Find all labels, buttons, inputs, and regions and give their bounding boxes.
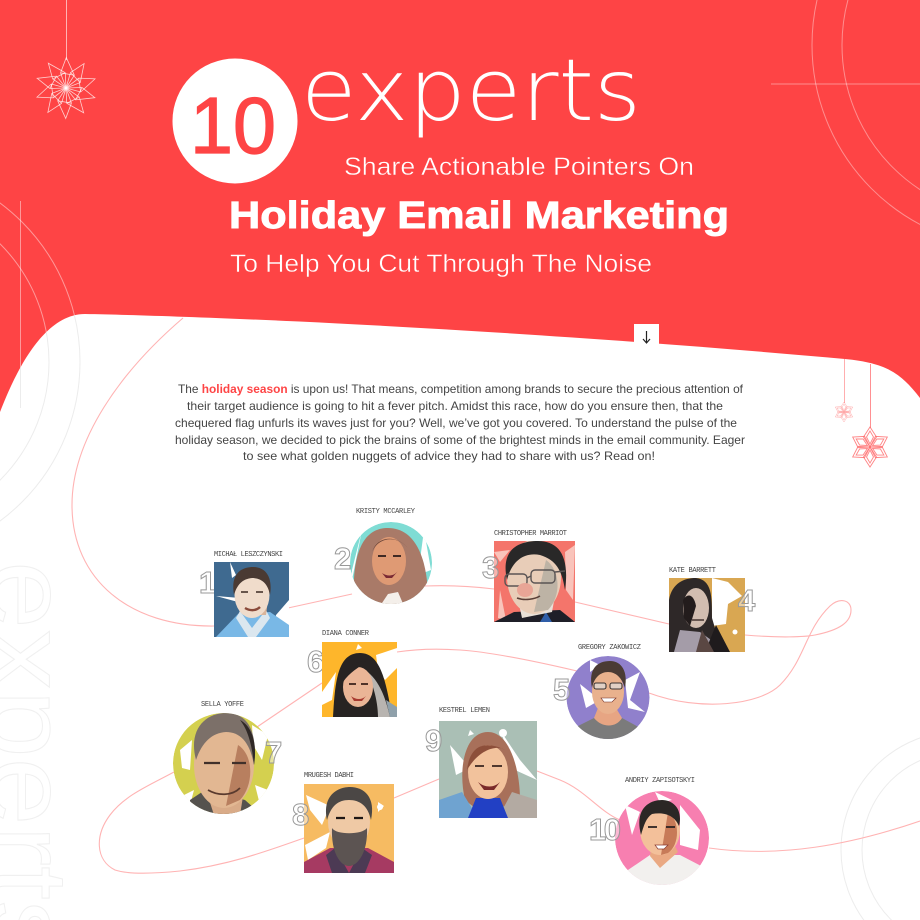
heading line: share actionable pointers: Share Actionable Pointers On: [344, 153, 694, 181]
expert 10: Andriy Zapisotskyi: ANDRIY ZAPISOTSKYI: [625, 777, 695, 785]
expert 1: Michał Leszczynski: MICHAŁ LESZCZYNSKI: [214, 551, 283, 559]
expert 6: Diana Conner: [307, 630, 397, 717]
intro paragraph: The holiday season is upon us! That means, competition among brands to secure the precious attention of: [178, 383, 744, 396]
snowflake ornament: large pink: [849, 364, 891, 467]
expert 8: Mrugesh Dabhi: [292, 772, 394, 873]
snowflake ornament: top left: [30, 0, 102, 123]
expert 7: Sella Yoffe: 7: [265, 735, 282, 770]
badge: number 10: [172, 58, 298, 184]
expert 5: Gregory Zakowicz: GREGORY ZAKOWICZ: [578, 644, 641, 652]
decorative rings: top right on red: [771, 0, 920, 248]
expert 4: Kate Barrett: 4: [738, 583, 756, 618]
white content panel: [0, 314, 920, 920]
intro paragraph: [175, 383, 745, 463]
intro paragraph: chequered flag unfurls its waves just for you? Well, we’ve got you covered. To understand the pulse of the: [175, 417, 737, 430]
expert 5: Gregory Zakowicz: [553, 644, 650, 745]
expert 6: Diana Conner: DIANA CONNER: [322, 630, 370, 638]
heading line: cut through the noise: To Help You Cut Through The Noise: [230, 250, 652, 278]
expert 3: Christopher Marriot: 3: [482, 550, 499, 585]
expert 8: Mrugesh Dabhi: MRUGESH DABHI: [304, 772, 354, 780]
expert 7: Sella Yoffe: SELLA YOFFE: [201, 701, 244, 709]
expert 9: Kestrel Lemen: KESTREL LEMEN: [439, 707, 490, 715]
expert 9: Kestrel Lemen: [425, 707, 537, 818]
arrow tab: [634, 324, 659, 344]
title: experts: experts: [301, 41, 641, 141]
intro paragraph: their target audience is going to hit a fever pitch. Amidst this race, how do you ensure then, that the: [187, 400, 723, 413]
expert 10: Andriy Zapisotskyi: 10: [589, 812, 621, 847]
heading: holiday email marketing: Holiday Email Marketing: [229, 195, 729, 237]
expert 8: Mrugesh Dabhi: 8: [292, 797, 309, 832]
decorative rings: top left on red: [0, 164, 80, 560]
expert 2: Kristy McCarley: 2: [334, 541, 351, 576]
expert 9: Kestrel Lemen: 9: [425, 723, 442, 758]
expert 1: Michał Leszczynski: 1: [199, 565, 216, 600]
faint rings on the white panel: [0, 315, 920, 920]
expert 5: Gregory Zakowicz: 5: [553, 672, 570, 707]
intro paragraph: to see what golden nuggets of advice they had to share with us? Read on!: [243, 450, 655, 463]
expert 4: Kate Barrett: KATE BARRETT: [669, 567, 716, 575]
expert 3: Christopher Marriot: CHRISTOPHER MARRIOT: [494, 530, 567, 538]
snowflake ornament: small pink: [834, 359, 854, 422]
badge: number 10: 10: [190, 81, 276, 170]
connecting pink path: [72, 318, 920, 873]
expert 1: Michał Leszczynski: [199, 551, 289, 637]
expert 2: Kristy McCarley: KRISTY MCCARLEY: [356, 508, 416, 516]
intro paragraph: holiday season, we decided to pick the brains of some of the brightest minds in the email community. Eager: [175, 434, 745, 447]
expert 2: Kristy McCarley: [334, 508, 432, 610]
red header background: [0, 0, 920, 430]
expert 6: Diana Conner: 6: [307, 644, 324, 679]
expert 7: Sella Yoffe: [173, 701, 282, 815]
expert 10: Andriy Zapisotskyi: [589, 777, 709, 890]
expert 4: Kate Barrett: [669, 567, 756, 652]
expert 3: Christopher Marriot: [482, 530, 575, 622]
